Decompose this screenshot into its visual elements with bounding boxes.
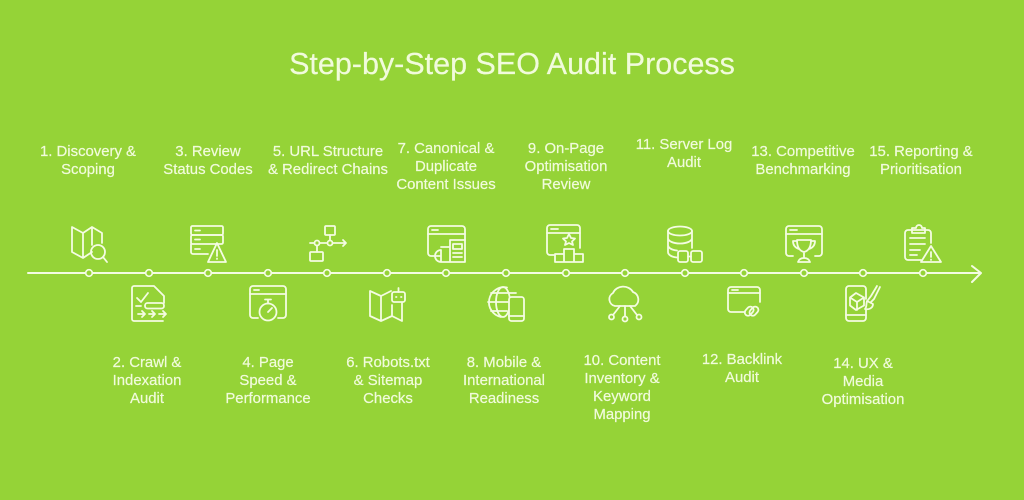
icon: map with robot [370,288,405,321]
label: step 8: Readiness [469,391,539,407]
label: step 15: 15. Reporting & [869,144,973,160]
label: step 5: & Redirect Chains [268,162,388,178]
icon: database with boxes [668,226,702,262]
label: step 13: 13. Competitive [751,144,855,160]
label: step 12: 12. Backlink [702,352,782,368]
label: step 9: 9. On-Page [528,141,604,157]
label: step 1: Scoping [61,162,115,178]
label: step 2: Indexation [113,373,181,389]
label: step 3: 3. Review [175,144,241,160]
label: step 14: 14. UX & [833,356,893,372]
title: Step-by-Step SEO Audit Process [289,47,735,81]
label: step 8: International [463,373,545,389]
label: step 2: 2. Crawl & [113,355,181,371]
label: step 4: 4. Page [242,355,294,371]
icon: browser with newspaper [428,226,465,262]
label: step 2: Audit [130,391,165,407]
icon: browser with podium star [547,225,583,262]
icon: server with warning [191,226,226,262]
label: step 6: Checks [363,391,413,407]
icon: checklist document [132,286,166,321]
label: step 4: Speed & [239,373,297,389]
label: step 1: 1. Discovery & [40,144,136,160]
timeline arrow with step dots [28,266,981,282]
label: step 10: Keyword [593,389,651,405]
icon: phone with cube and brush [846,286,880,321]
label: step 10: Inventory & [584,371,660,387]
label: step 7: 7. Canonical & [398,141,494,157]
label: step 13: Benchmarking [755,162,851,178]
label: step 11: Audit [667,155,702,171]
label: step 14: Media [843,374,884,390]
label: step 6: 6. Robots.txt [346,355,430,371]
label: step 3: Status Codes [163,162,253,178]
icon: clipboard with warning [905,225,941,262]
icon: browser with stopwatch [250,286,286,320]
icon: cloud with nodes [609,287,642,322]
icon: browser with trophy [786,226,822,262]
label: step 10: 10. Content [584,353,660,369]
label: step 10: Mapping [593,407,651,423]
icon: URL flow diagram [310,226,346,261]
label: step 9: Review [542,177,591,193]
label: step 9: Optimisation [525,159,607,175]
icon: globe with phone [488,287,524,321]
label: step 4: Performance [225,391,311,407]
icon: map with magnifier [72,227,107,262]
label: step 15: Prioritisation [880,162,962,178]
label: step 6: & Sitemap [354,373,422,389]
label: step 14: Optimisation [822,392,904,408]
label: step 8: 8. Mobile & [467,355,541,371]
label: step 5: 5. URL Structure [273,144,383,160]
icon: browser with chain link [728,287,760,317]
label: step 11: 11. Server Log [636,137,732,153]
label: step 7: Duplicate [415,159,477,175]
label: step 7: Content Issues [396,177,496,193]
label: step 12: Audit [725,370,760,386]
